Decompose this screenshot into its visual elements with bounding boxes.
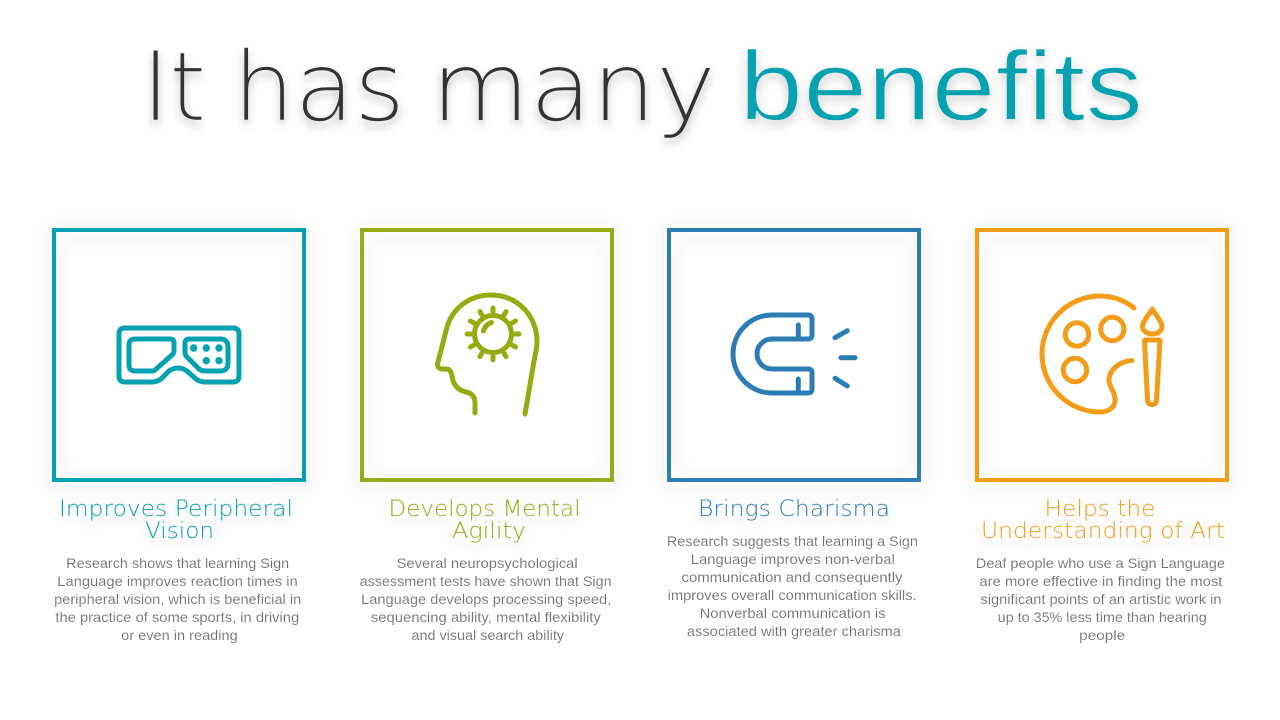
heading: Understanding of Art [981,519,1225,544]
body text [360,555,612,643]
body text: and visual search ability [412,627,564,643]
body text: Nonverbal communication is [700,605,886,621]
heading [388,497,580,544]
body text: Language develops processing speed, [361,591,611,607]
title: It [142,33,206,143]
panel: brings charisma [667,230,919,639]
body text [976,555,1225,643]
heading: Develops Mental [388,497,580,522]
body text: communication and consequently [682,569,902,585]
body text: assessment tests have shown that Sign [360,573,612,589]
body text: people [1079,627,1125,643]
heading: Brings Charisma [698,497,890,522]
heading [59,497,293,544]
body text: significant points of an artistic work in [980,591,1222,607]
body text: or even in reading [121,627,238,643]
body text [667,533,918,639]
body text: associated with greater charisma [687,623,901,639]
icon: magnet [733,315,855,393]
body text: sequencing ability, mental flexibility [371,609,601,625]
body text: Language improves reaction times in [57,573,298,589]
body text: Several neuropsychological [396,555,578,571]
panel: helps the understanding of art [976,230,1227,643]
body text: improves overall communication skills. [668,587,917,603]
title: benefits [739,31,1143,141]
body text: Language improves non-verbal [691,551,895,567]
body text [54,555,301,643]
heading: Agility [452,519,526,544]
card frame [362,230,612,480]
title: has [233,33,405,143]
body text: Deaf people who use a Sign Language [976,555,1225,571]
body text: are more effective in finding the most [979,573,1223,589]
panel: develops mental agility [360,230,612,643]
heading: Helps the [1044,497,1156,522]
title: many [431,33,716,143]
title [142,31,1143,143]
heading [981,497,1225,544]
body text: Research suggests that learning a Sign [667,533,918,549]
card frame [669,230,919,480]
icon: smart glasses [119,328,239,382]
body text: Research shows that learning Sign [66,555,289,571]
icon: palette and brush [1042,296,1162,412]
heading: Vision [145,519,214,544]
heading: Improves Peripheral [59,497,293,522]
body text: peripheral vision, which is beneficial in [54,591,301,607]
card frame [977,230,1227,480]
body text: up to 35% less time than hearing [998,609,1207,625]
icon: head with gear [438,295,537,414]
panel: improves peripheral vision [54,230,304,643]
body text: the practice of some sports, in driving [55,609,299,625]
card frame [54,230,304,480]
